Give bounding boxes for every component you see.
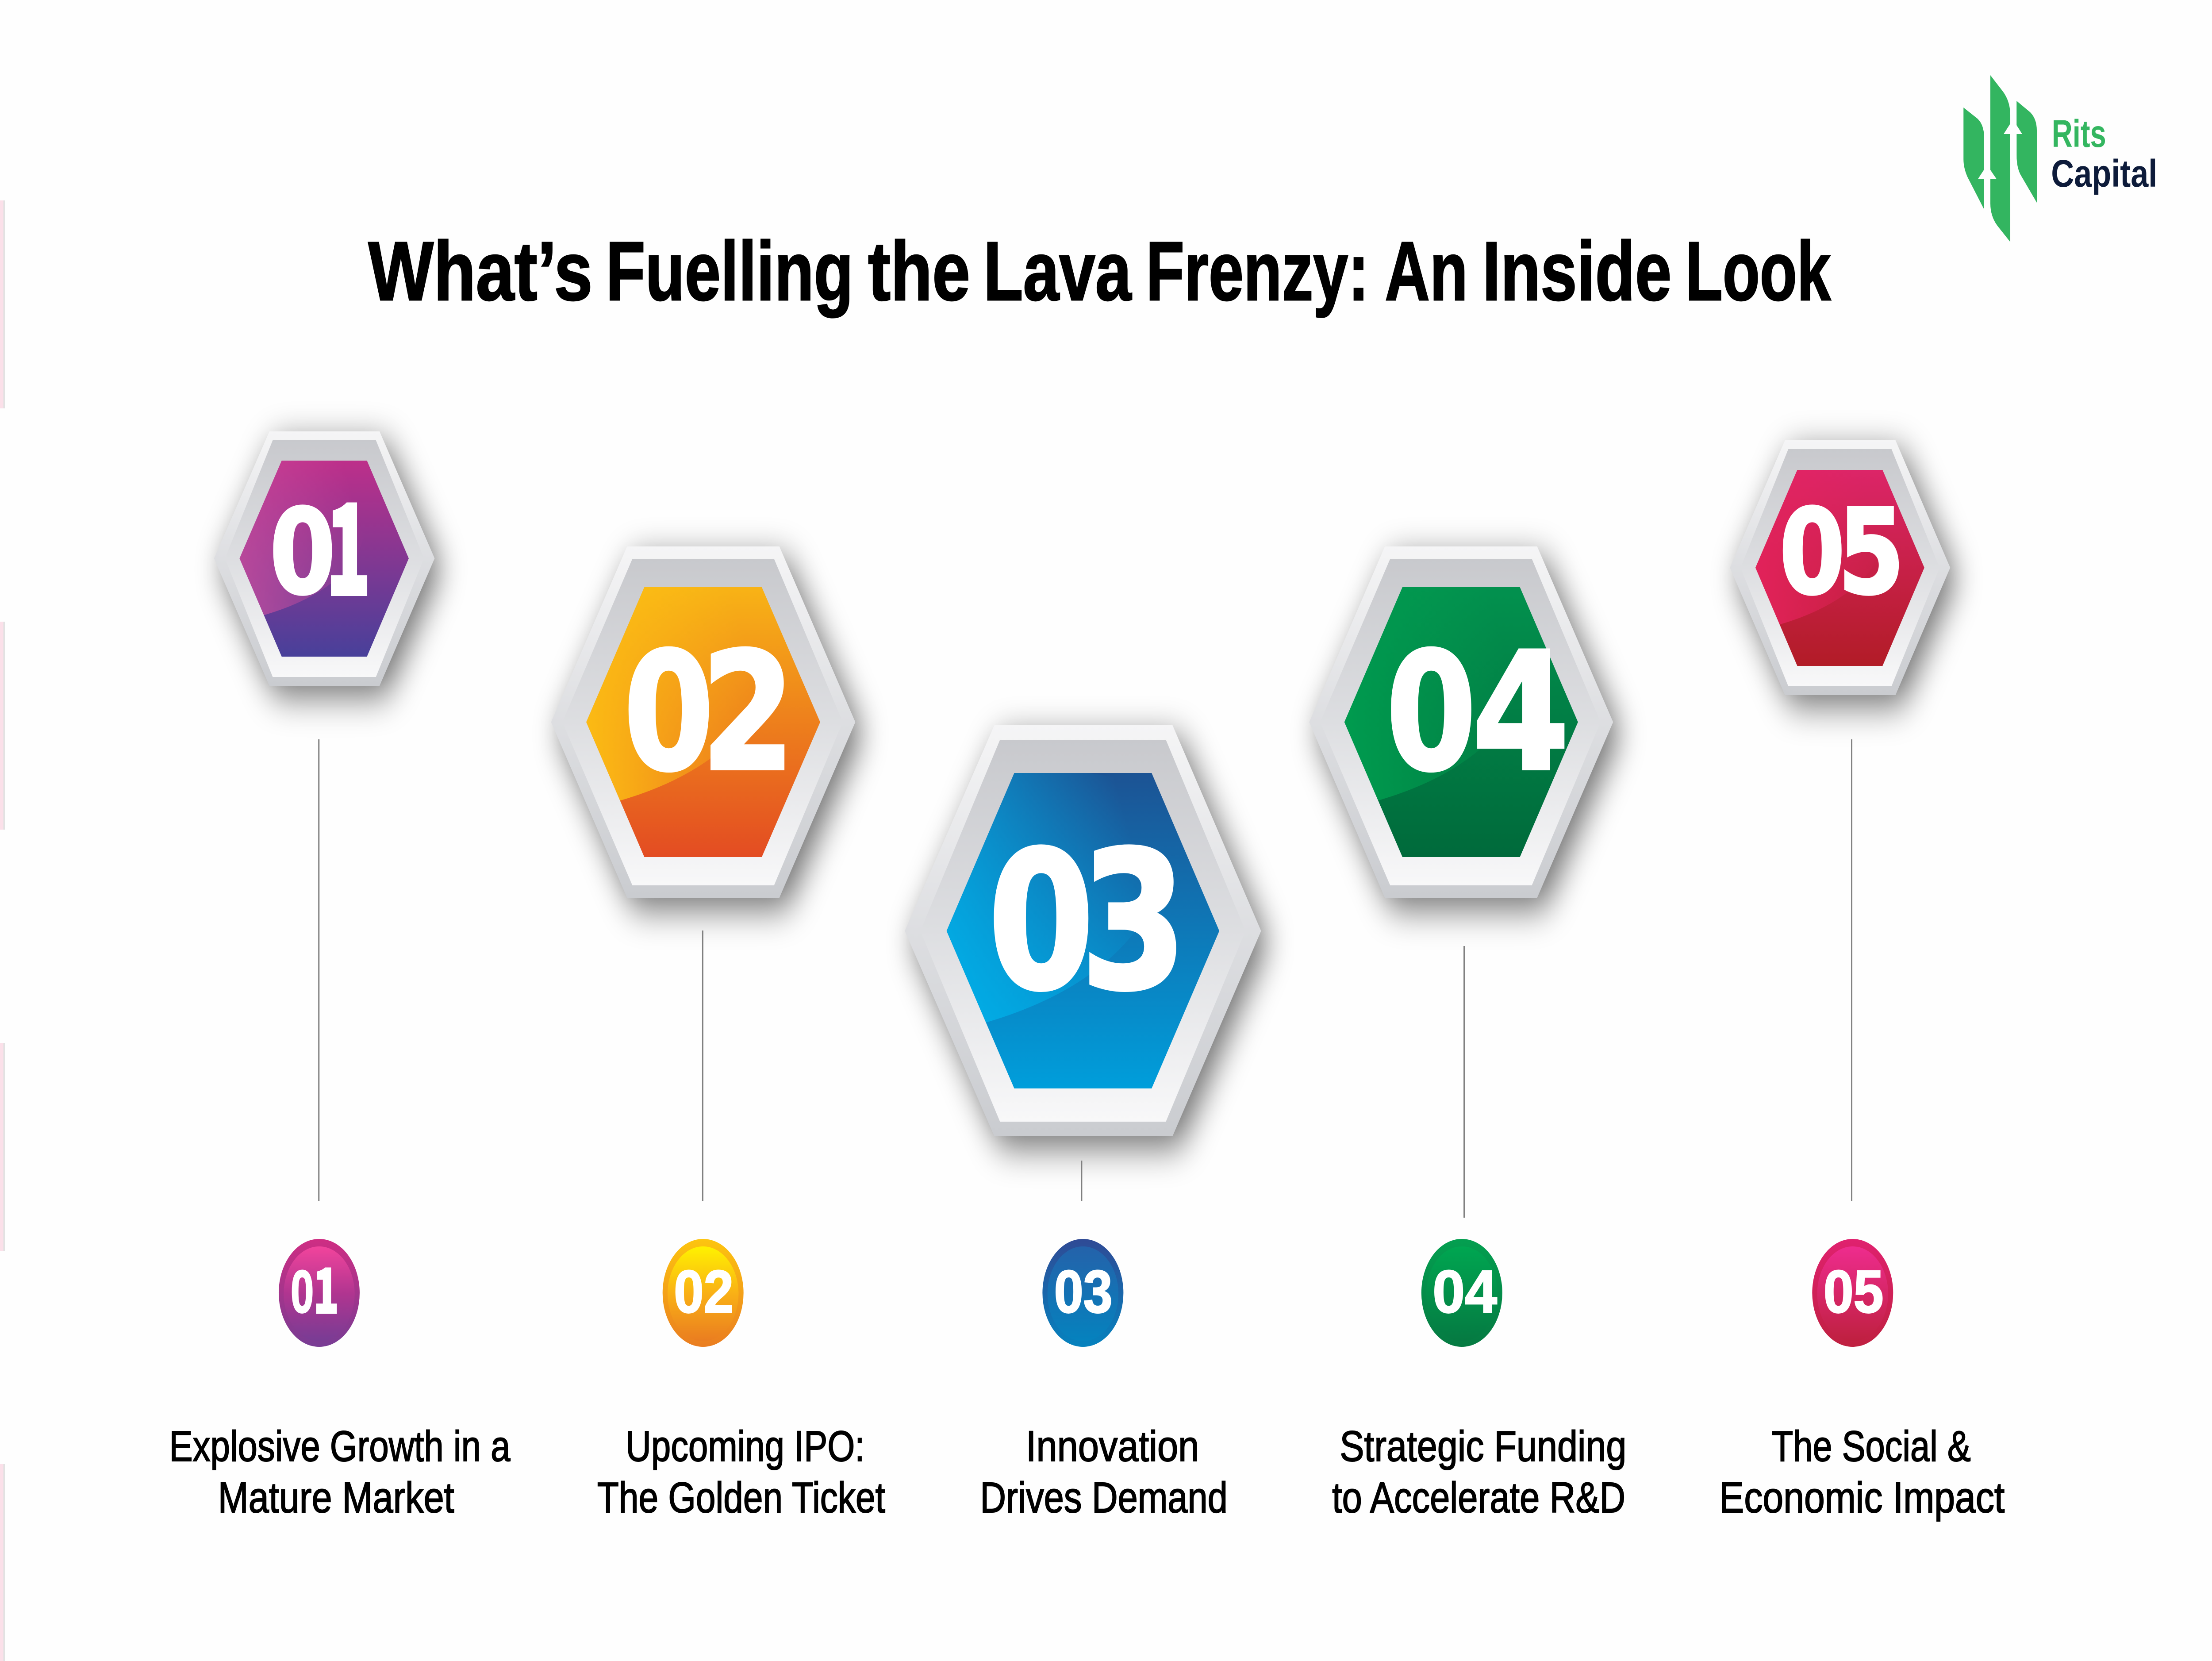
label 05 xyxy=(1719,1423,2005,1522)
number 01 xyxy=(270,452,370,628)
label 01: Mature Market xyxy=(218,1474,454,1522)
label 02: The Golden Ticket xyxy=(597,1474,885,1522)
badge 01 xyxy=(279,1239,360,1347)
badge 05 xyxy=(1812,1239,1893,1347)
badge 02 xyxy=(663,1239,744,1347)
badge 04: 04 xyxy=(1432,1258,1497,1325)
hexagon 01 xyxy=(214,431,441,696)
title: An xyxy=(1385,225,1468,318)
title: Inside xyxy=(1482,225,1671,318)
title: Lava xyxy=(983,225,1132,318)
title: Fuelling xyxy=(606,225,853,318)
number 01: 1 xyxy=(327,452,370,628)
shadow xyxy=(1317,558,1621,909)
label 04 xyxy=(1332,1423,1626,1522)
number 05: 5 xyxy=(1838,485,1905,621)
label 04: Strategic Funding xyxy=(1340,1423,1626,1470)
number 05 xyxy=(1779,485,1905,621)
shadow xyxy=(558,558,863,909)
number 04: 4 xyxy=(1472,619,1569,807)
label 04: to Accelerate R&D xyxy=(1332,1474,1625,1522)
number 01: 0 xyxy=(270,485,335,621)
hexagon 05 xyxy=(1730,440,1957,706)
logo: Rits Capital xyxy=(1963,75,2157,242)
title: Frenzy: xyxy=(1146,225,1369,318)
number 03: 3 xyxy=(1081,812,1187,1032)
shadow xyxy=(912,737,1268,1148)
wordmark: Rits xyxy=(2052,112,2106,155)
connector line 01 xyxy=(318,739,319,1201)
title: What’s xyxy=(368,225,592,318)
badge 03: 03 xyxy=(1054,1258,1113,1325)
number 02: 2 xyxy=(701,619,795,807)
number 02: 0 xyxy=(624,619,714,807)
label 01 xyxy=(169,1423,511,1522)
number 03 xyxy=(988,812,1187,1032)
badge 01: 01 xyxy=(291,1243,338,1330)
label 05: Economic Impact xyxy=(1719,1474,2005,1522)
shadow xyxy=(221,442,441,696)
label 03 xyxy=(980,1423,1228,1522)
label 02: Upcoming IPO: xyxy=(626,1423,864,1470)
badge 03 xyxy=(1042,1239,1123,1347)
number 03: 0 xyxy=(988,812,1094,1032)
hexagon 03 xyxy=(905,725,1268,1148)
hexagon 02 xyxy=(551,546,863,909)
label 05: The Social & xyxy=(1772,1423,1971,1470)
logo: Rits Capital: Capital xyxy=(2051,152,2157,195)
title xyxy=(368,225,1831,318)
icon: three green bars with up arrows xyxy=(1963,75,2037,242)
number 02 xyxy=(624,619,795,807)
shadow xyxy=(1736,451,1957,706)
number 04: 0 xyxy=(1386,619,1476,807)
connector line 05 xyxy=(1851,739,1852,1201)
title: Look xyxy=(1686,225,1831,318)
number 04 xyxy=(1386,619,1569,807)
number 05: 0 xyxy=(1779,485,1845,621)
label 01: Explosive Growth in a xyxy=(169,1423,511,1470)
connector line 02 xyxy=(702,930,703,1201)
label 03: Innovation xyxy=(1026,1423,1199,1470)
label 02 xyxy=(597,1423,885,1522)
badge 04 xyxy=(1421,1239,1502,1347)
title: the xyxy=(868,225,970,318)
badge 02: 02 xyxy=(674,1258,733,1325)
label 03: Drives Demand xyxy=(980,1474,1228,1522)
connector line 04 xyxy=(1463,946,1465,1218)
hexagon 04 xyxy=(1309,546,1621,909)
connector line 03 xyxy=(1081,1161,1082,1201)
badge 05: 05 xyxy=(1824,1258,1884,1325)
